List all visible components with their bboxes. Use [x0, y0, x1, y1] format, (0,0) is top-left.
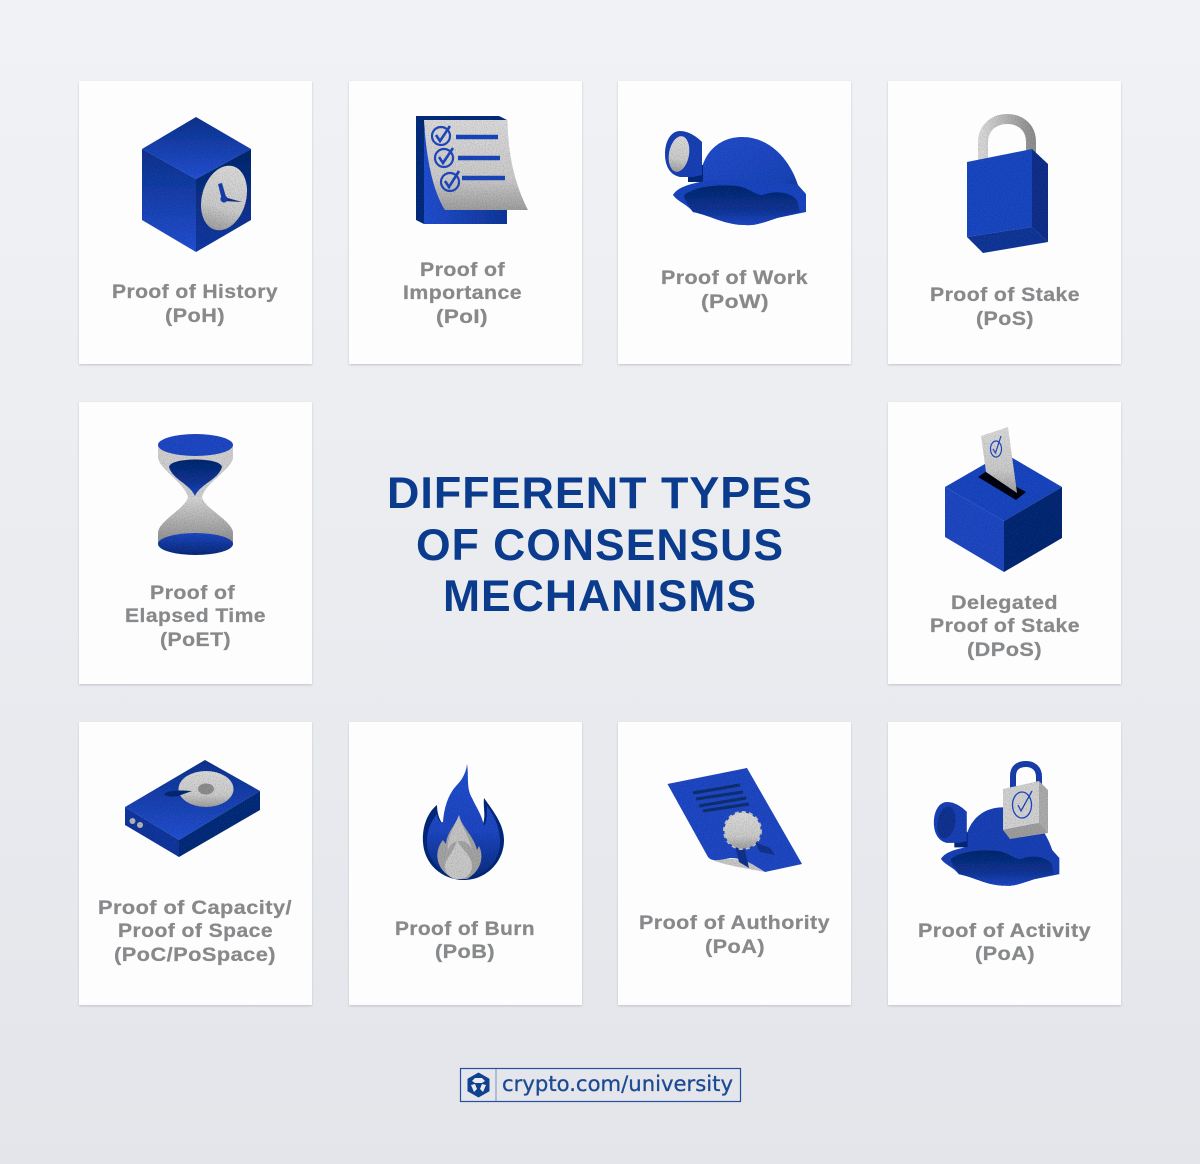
- label: (PoA): [975, 943, 1035, 965]
- icon: padlock: [967, 119, 1048, 253]
- icon: helmet with padlock: [934, 764, 1059, 886]
- label: Elapsed Time: [125, 605, 266, 627]
- label: (PoET): [160, 629, 231, 651]
- label: [395, 918, 535, 963]
- icon: checklist document: [416, 116, 528, 224]
- title: DIFFERENT TYPES: [387, 469, 813, 518]
- panel: Proof of Work: [618, 81, 851, 365]
- label: (PoS): [976, 308, 1034, 330]
- icon: crypto.com logo: [468, 1073, 489, 1097]
- label: [98, 897, 292, 966]
- panel: Proof of Elapsed Time: [79, 402, 312, 685]
- label: Proof of Activity: [918, 920, 1091, 942]
- icon: ballot box: [945, 427, 1062, 572]
- title: MECHANISMS: [443, 572, 757, 621]
- label: (PoB): [435, 941, 495, 963]
- title: OF CONSENSUS: [416, 521, 784, 570]
- label: (PoW): [701, 291, 769, 313]
- icon: certificate: [668, 768, 802, 872]
- title: [387, 469, 813, 621]
- label: Proof of Stake: [930, 615, 1080, 637]
- icon: hard drive: [125, 760, 260, 857]
- label: [403, 259, 522, 328]
- label: Proof of: [150, 582, 235, 604]
- label: (PoA): [705, 936, 765, 958]
- label: Proof of Work: [661, 267, 808, 289]
- label: [639, 912, 830, 958]
- panel: Proof of Burn: [349, 722, 582, 1006]
- label: [930, 284, 1080, 330]
- label: (PoC/PoSpace): [114, 944, 276, 966]
- icon: cube with clock: [142, 117, 254, 252]
- label: [918, 920, 1091, 965]
- label: Proof of History: [112, 281, 278, 303]
- panel: Proof of Capacity / Space: [79, 722, 312, 1006]
- label: Importance: [403, 282, 522, 304]
- label: (PoH): [165, 305, 225, 327]
- label: Proof of Capacity/: [98, 897, 292, 919]
- label: Proof of Authority: [639, 912, 830, 934]
- label: Proof of: [420, 259, 505, 281]
- panel: Proof of Importance: [349, 81, 582, 365]
- website text: crypto.com/university: [502, 1072, 733, 1096]
- label: (PoI): [436, 306, 488, 328]
- icon: hourglass: [158, 434, 233, 555]
- panel: Proof of Authority: [618, 722, 851, 1006]
- icon: flame: [423, 764, 504, 880]
- footer: crypto.com/university: [460, 1068, 740, 1102]
- panel: Proof of Stake: [888, 81, 1121, 365]
- label: [125, 582, 266, 651]
- label: Proof of Space: [118, 920, 273, 942]
- panel: Delegated Proof of Stake: [888, 402, 1121, 685]
- label: Delegated: [951, 592, 1058, 614]
- icon: miner helmet: [665, 131, 806, 225]
- label: (DPoS): [967, 639, 1042, 661]
- label: Proof of Stake: [930, 284, 1080, 306]
- panel: Proof of Activity: [888, 722, 1121, 1006]
- label: [930, 592, 1080, 661]
- label: Proof of Burn: [395, 918, 535, 940]
- label: [661, 267, 808, 313]
- label: [112, 281, 278, 327]
- panel: Proof of History: [79, 81, 312, 365]
